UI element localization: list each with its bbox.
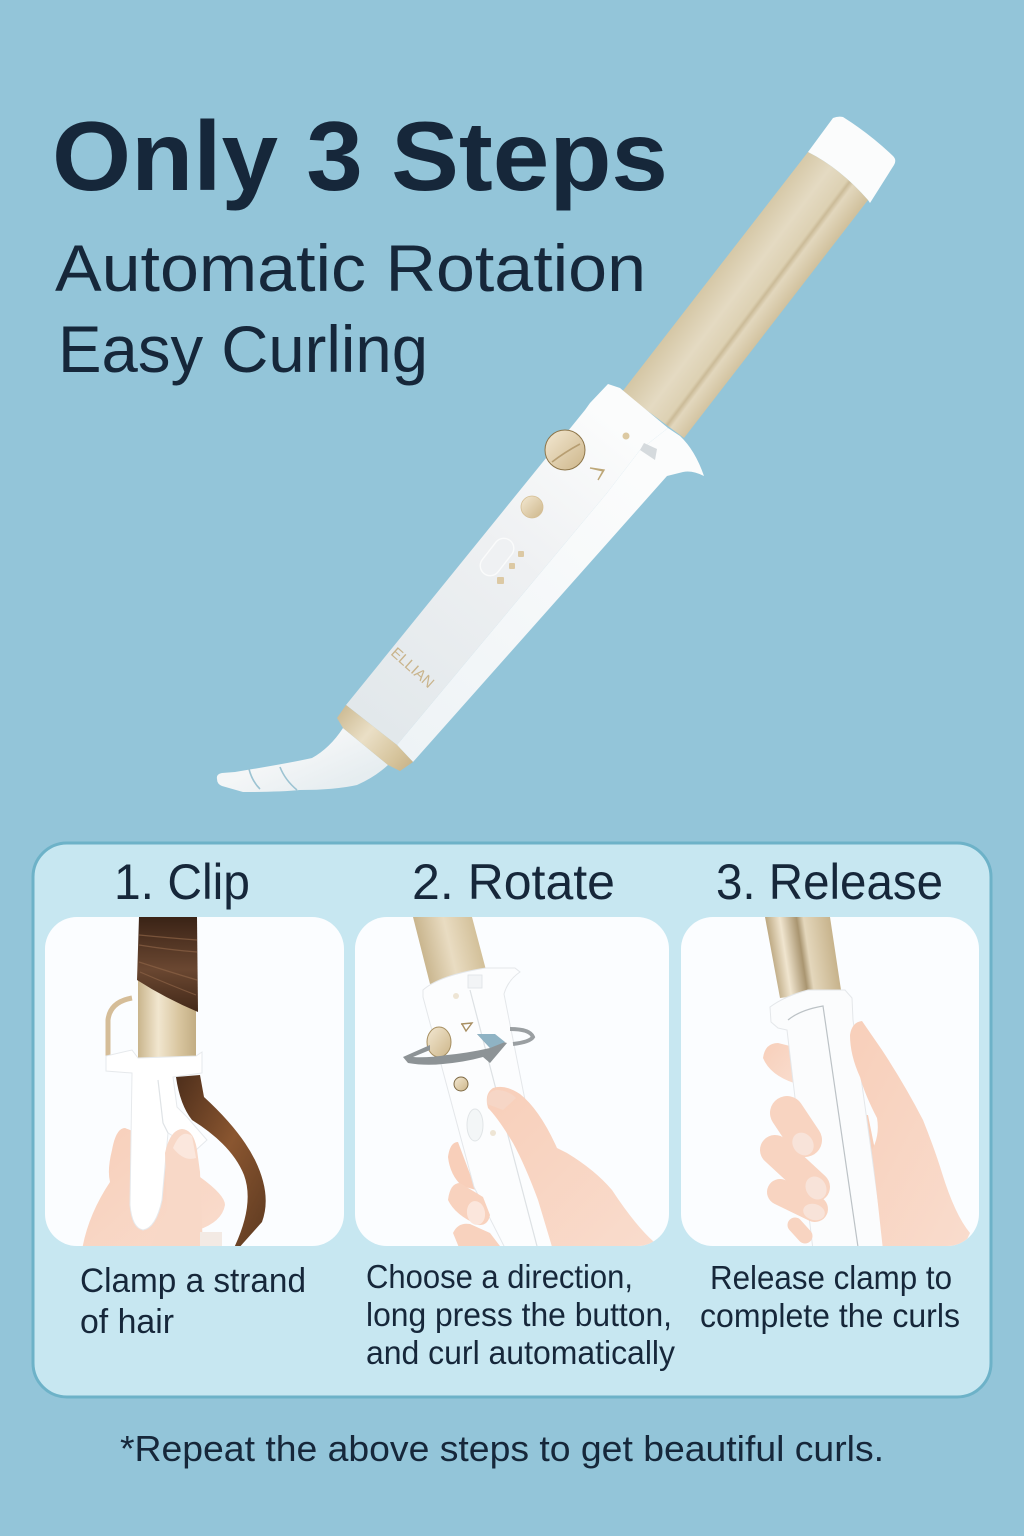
subtitle (55, 231, 646, 386)
back finger (763, 1043, 794, 1083)
caption: step 1: Clamp a strand (80, 1262, 306, 1300)
hook clip (108, 998, 132, 1056)
card: release illustration (681, 917, 979, 1250)
display oval (467, 1109, 483, 1141)
power button (454, 1077, 468, 1091)
footnote: *Repeat the above steps to get beautiful curls. (120, 1428, 884, 1469)
handle (770, 990, 885, 1250)
lower fingers (448, 1183, 500, 1246)
panel: steps (33, 843, 991, 1397)
caption: step 2: and curl automatically (366, 1334, 675, 1371)
clamp notch (640, 443, 657, 460)
gold barrels (765, 917, 841, 998)
rotate button (427, 1027, 451, 1057)
caption: step 2 (366, 1258, 675, 1371)
hand and thumb (850, 1021, 970, 1250)
fingers (775, 1113, 815, 1236)
card: rotate illustration (355, 917, 669, 1250)
fingernail (467, 1201, 485, 1225)
tail guard (217, 728, 388, 792)
rotate button (545, 430, 585, 470)
clamp handle (106, 1050, 207, 1230)
gold barrel (413, 917, 486, 984)
heading: step 3: 3. Release (716, 854, 943, 910)
product: curling wand (217, 117, 895, 792)
caption: step 2: Choose a direction, (366, 1258, 633, 1295)
subtitle: Automatic Rotation (55, 231, 646, 305)
caption: step 1 (80, 1262, 306, 1341)
card: clip illustration (45, 917, 344, 1250)
title: Only 3 Steps (52, 101, 668, 211)
handle (422, 968, 525, 1246)
hair strand (176, 1075, 266, 1250)
white tip cap (808, 117, 895, 203)
subtitle: Easy Curling (58, 312, 428, 386)
back ring of rotation arrow (510, 1029, 533, 1044)
caption: step 1: of hair (80, 1303, 174, 1341)
arrow logo (590, 468, 604, 480)
palm behind (866, 1115, 874, 1166)
gold barrel (622, 152, 868, 438)
upper finger (448, 1142, 476, 1190)
indicator marks (497, 551, 524, 584)
power button (521, 496, 543, 518)
handle right panel (397, 428, 704, 762)
heading: step 1: 1. Clip (114, 854, 250, 910)
palm (82, 1128, 225, 1250)
gold barrel (138, 980, 196, 1058)
wrapped hair (137, 917, 198, 1012)
small dot (622, 432, 630, 440)
gold ring (337, 705, 413, 771)
fingernails (792, 1132, 826, 1220)
arrow logo (461, 1023, 472, 1031)
handle left panel (346, 384, 668, 745)
display oval (476, 534, 518, 580)
thumb (165, 1129, 202, 1235)
brand text: ELLIAN (387, 644, 437, 692)
heading: step 2: 2. Rotate (412, 854, 615, 910)
thumb and hand (487, 1087, 654, 1250)
caption: step 3: Release clamp to (710, 1259, 952, 1296)
caption: step 2: long press the button, (366, 1296, 672, 1333)
caption: step 3: complete the curls (700, 1297, 960, 1334)
rotation arrow (403, 1034, 507, 1065)
caption: step 3 (700, 1259, 960, 1334)
